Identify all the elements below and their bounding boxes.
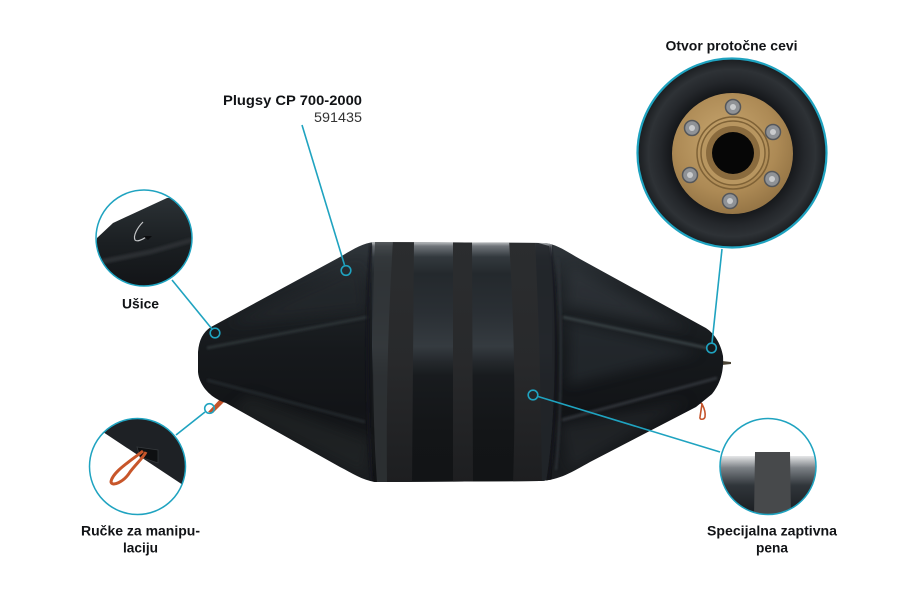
handle slot bbox=[137, 447, 158, 463]
handle photo: dark rubber bbox=[104, 419, 185, 484]
central cylinder bbox=[372, 238, 552, 486]
cones bbox=[190, 235, 730, 490]
callout line: Ručke bbox=[176, 404, 214, 435]
weld lines bbox=[367, 245, 561, 480]
label: Ručke za manipulaciju: Ručke za manipu- bbox=[81, 522, 200, 538]
callout line: Ušice bbox=[172, 280, 220, 338]
cylinder side shading bbox=[373, 242, 393, 482]
label: Specijalna zaptivna pena: Specijalna zaptivna bbox=[707, 522, 837, 538]
band 2 bbox=[453, 240, 473, 484]
cone seams bbox=[207, 317, 717, 422]
right handle loop bbox=[697, 400, 705, 419]
foam strip bbox=[754, 452, 791, 518]
right valve stub bbox=[722, 361, 731, 365]
rubber end cap bbox=[637, 58, 827, 248]
orange loop bbox=[111, 451, 146, 484]
eyelet photo: dark rubber bbox=[96, 198, 192, 286]
brass flange bbox=[672, 93, 793, 214]
label: Ručke za manipulaciju bbox=[81, 522, 200, 556]
left handle loop bbox=[208, 397, 226, 413]
band 1 bbox=[387, 240, 414, 484]
flange bolts bbox=[682, 100, 780, 208]
label: Ručke za manipulaciju: laciju bbox=[123, 540, 158, 556]
label: Specijalna zaptivna pena bbox=[707, 522, 837, 556]
bolt tips bbox=[687, 104, 776, 204]
main product: inflatable pipe plug bbox=[190, 235, 731, 490]
cone highlights bbox=[569, 328, 679, 382]
callout line: Plugsy bbox=[302, 125, 351, 275]
label: Otvor protočne cevi: Otvor protočne cevi bbox=[666, 38, 798, 54]
center hole bbox=[712, 132, 754, 174]
eyelet ring bbox=[134, 222, 146, 241]
label: Ušice: Ušice bbox=[122, 296, 159, 312]
label: article number: 591435 bbox=[314, 109, 362, 125]
foam photo: cylinder background bbox=[720, 456, 816, 512]
callout line: pena bbox=[528, 390, 720, 452]
band 3 bbox=[509, 240, 542, 484]
detail circle: handling handles bbox=[90, 414, 190, 514]
callout line: Otvor bbox=[707, 249, 722, 353]
flange rings bbox=[697, 117, 769, 189]
label: Specijalna zaptivna pena: pena bbox=[756, 540, 788, 556]
label: Plugsy CP 700-2000: Plugsy CP 700-2000 bbox=[223, 92, 362, 108]
detail circle: sealing foam bbox=[715, 418, 821, 518]
detail circle: flow pipe opening bbox=[637, 58, 827, 248]
detail circle: eyelets bbox=[95, 189, 193, 287]
infographic bbox=[82, 40, 838, 556]
